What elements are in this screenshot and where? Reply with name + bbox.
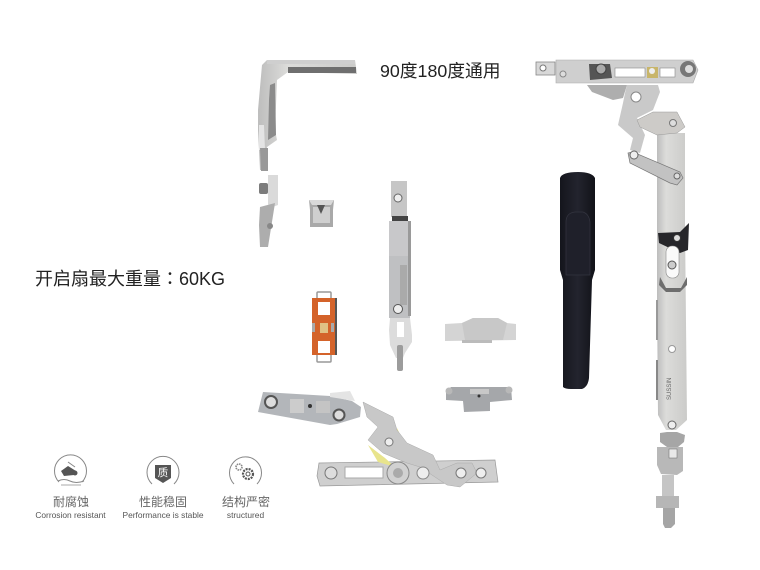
- stay link plate: [618, 85, 660, 153]
- engraved brand text: SUSSIN: [667, 378, 673, 400]
- part: wedge keeper: [445, 318, 516, 343]
- part: small striker plate: [446, 386, 512, 412]
- hinge arm middle: [363, 402, 477, 487]
- feature: corrosion resistant: [35, 455, 106, 520]
- part: central lock bar: [389, 181, 412, 371]
- part: window handle: [560, 172, 595, 389]
- slot and screw: [666, 246, 679, 278]
- part: long friction stay arm: [536, 60, 698, 528]
- feature: performance stable: [122, 456, 204, 520]
- lower pivot hardware: [668, 346, 676, 352]
- icon: quality badge: 质: [158, 467, 168, 479]
- icon: gears: [230, 457, 262, 484]
- yellow hinge washer: [368, 445, 395, 467]
- main vertical arm: [657, 133, 687, 430]
- black bracket: [658, 223, 689, 253]
- feature: structured: [222, 457, 270, 520]
- part: small square keeper: [309, 200, 334, 227]
- heading: 90/180 degree: 90度180度通用: [380, 61, 501, 81]
- feature: corrosion resistant: 耐腐蚀: [53, 494, 89, 509]
- part: orange slider block: [312, 292, 337, 362]
- heading: max sash weight: 开启扇最大重量：60KG: [35, 265, 225, 291]
- feature: structured: 结构严密: [222, 494, 270, 509]
- hinge arm upper: [258, 392, 361, 425]
- link bar: [628, 152, 683, 185]
- feature: structured: structured: [227, 510, 264, 520]
- part: lower hinge assembly: [258, 391, 498, 487]
- feature: performance stable: Performance is stable: [122, 510, 204, 520]
- feature: performance stable: 性能稳固: [139, 494, 187, 509]
- small stay plate: [587, 85, 627, 100]
- hinge frame plate: [317, 460, 498, 486]
- icon: corrosion: [54, 455, 86, 485]
- feature: corrosion resistant: Corrosion resistant: [35, 510, 106, 520]
- wing plate: [637, 112, 685, 135]
- top slide rail: [556, 60, 698, 83]
- part: L-shaped corner drive: [258, 60, 357, 247]
